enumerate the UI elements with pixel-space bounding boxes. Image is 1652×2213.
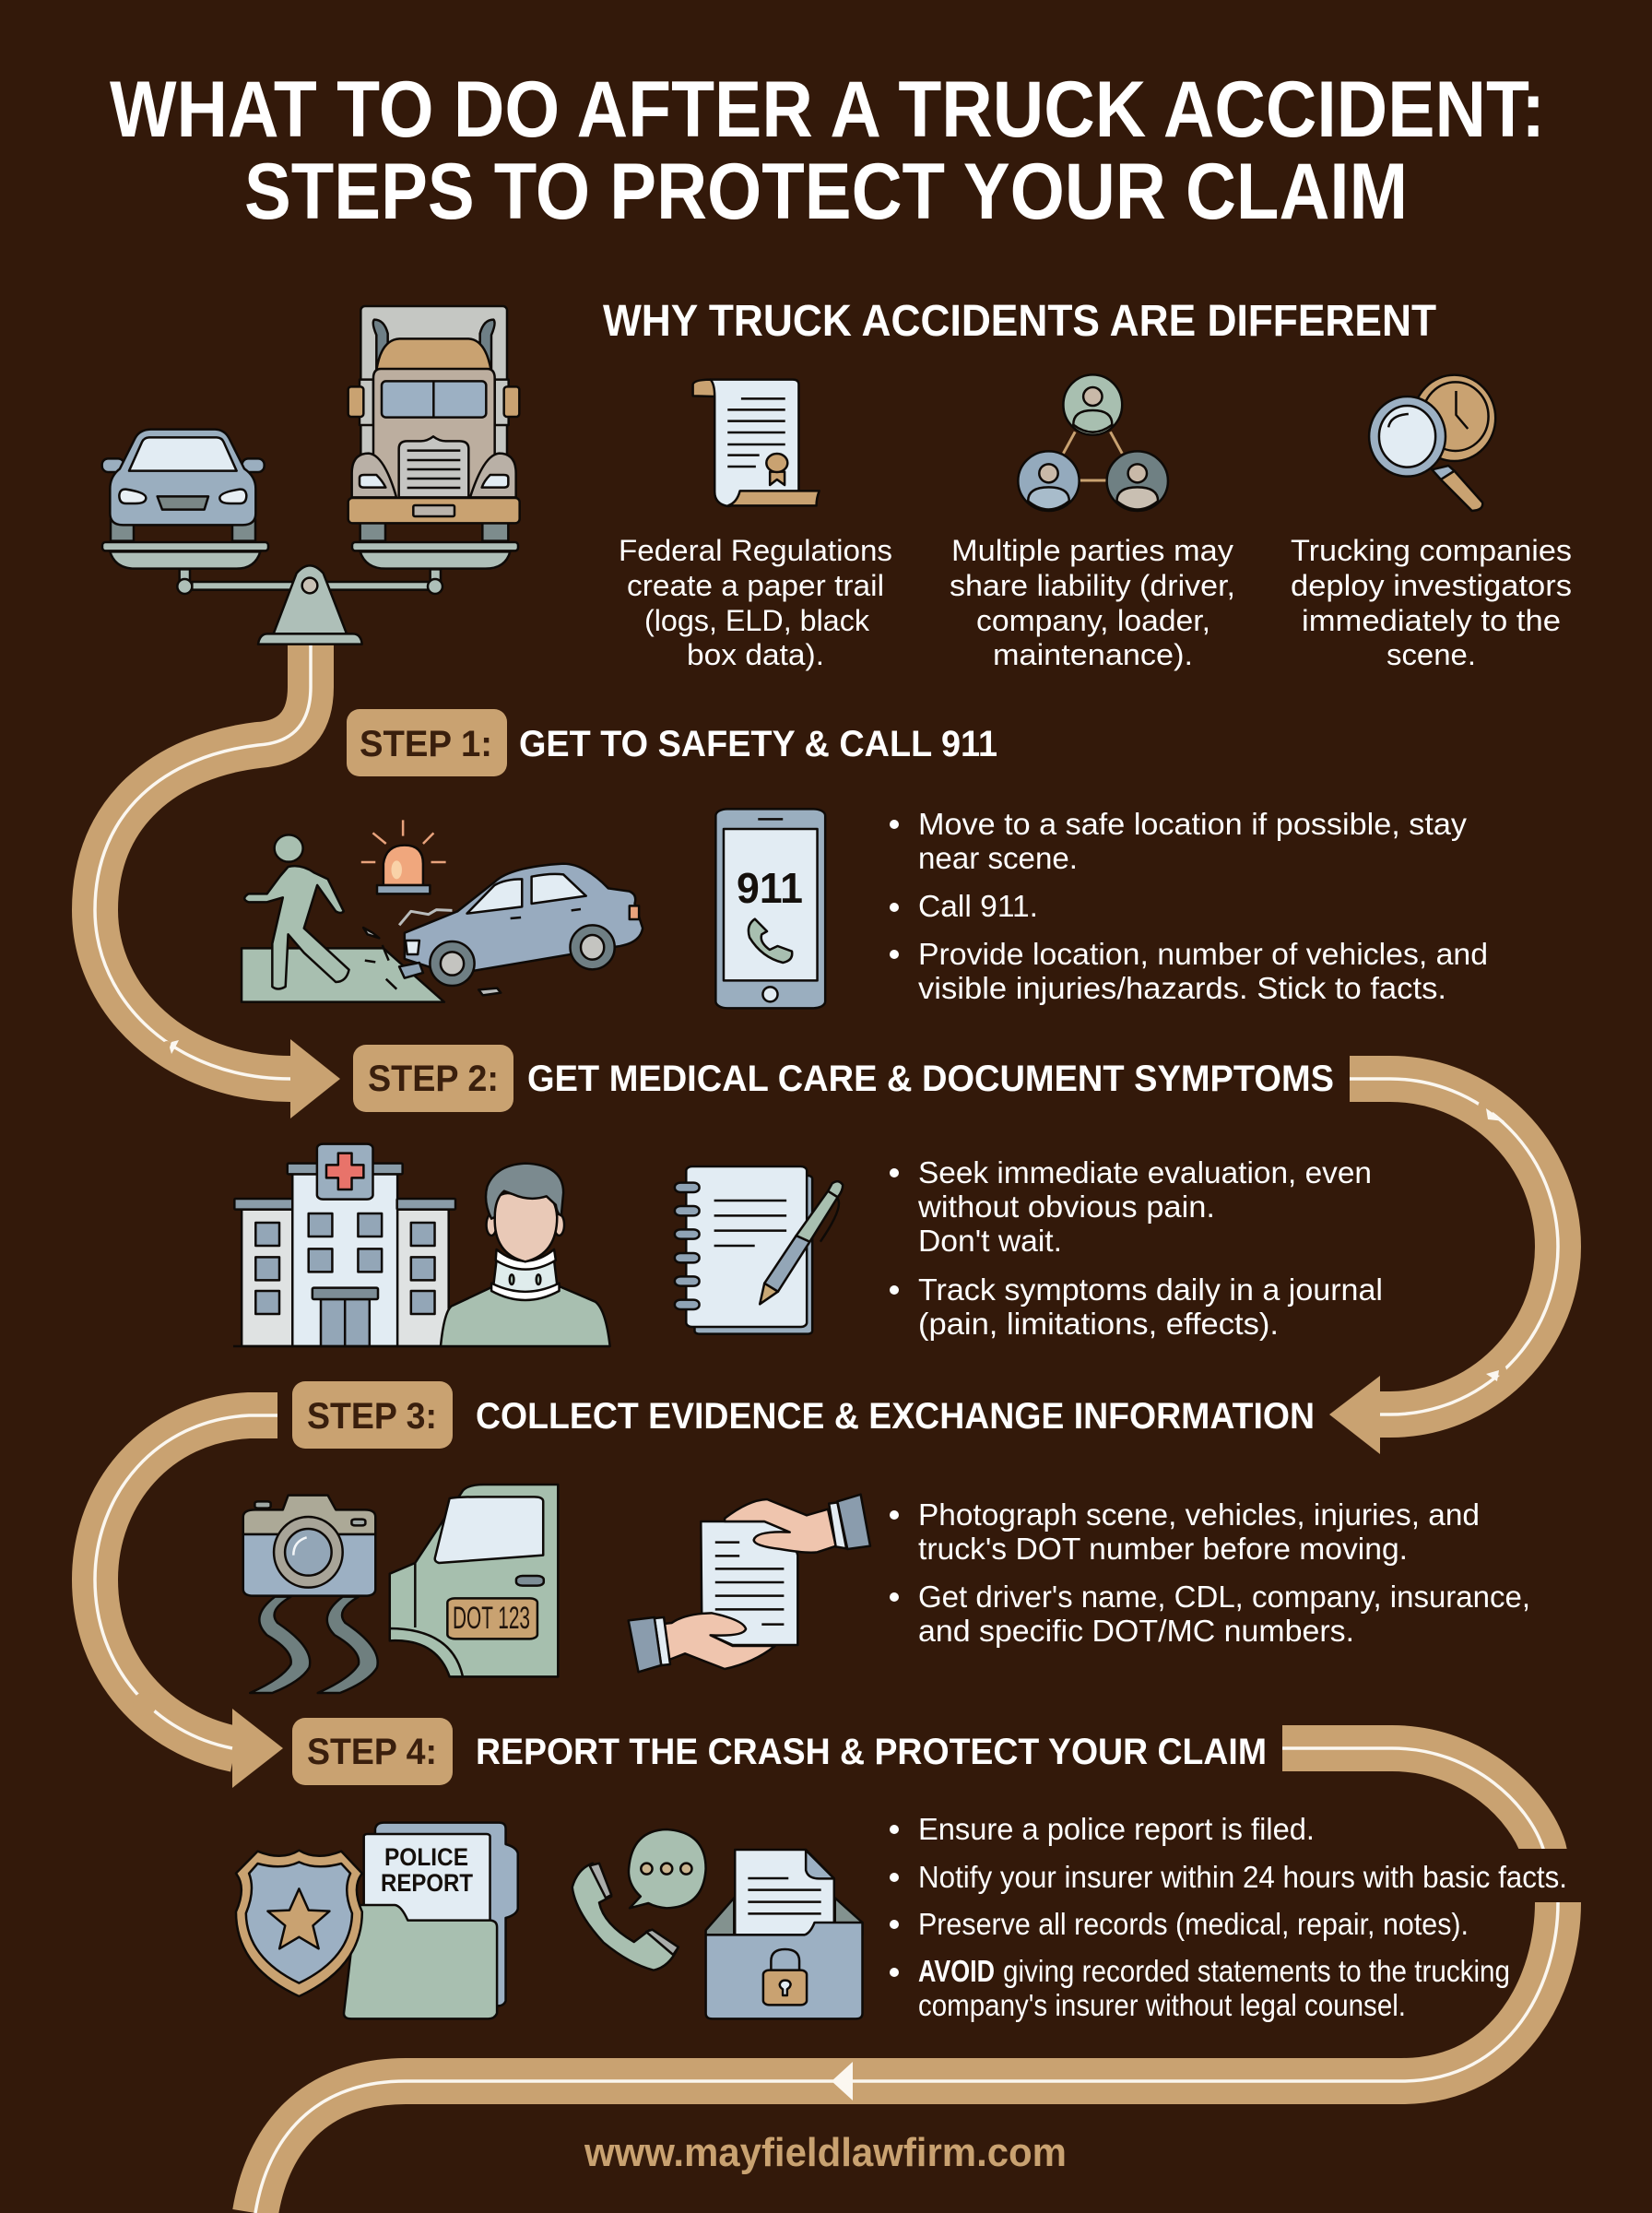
bullets: step 2: (pain, limitations, effects). [918,1307,1279,1341]
truck [348,306,520,541]
bullets: step 4: giving recorded statements to the trucking [1003,1954,1510,1988]
text: federal regulations: Federal Regulations [619,534,892,567]
icon: phone and speech bubble [572,1829,706,1970]
icon: police badge and report folder: REPORT [381,1869,473,1897]
road: step 4 curve to the notify line [1282,1748,1595,1902]
bullets: step 4: company's insurer without legal counsel. [918,1988,1406,2022]
icon: hospital [233,1144,610,1346]
panel: step 4 [236,1718,1567,2022]
road: lower loop running off the page [255,1902,1558,2213]
text: trucking companies [1291,534,1572,671]
bullets: step 3 [890,1497,1530,1648]
text: trucking companies: scene. [1386,638,1476,671]
icon: phone dialing 911 [715,809,825,1008]
icon: patient in neck brace [441,1164,610,1346]
icon: police badge and report folder: POLICE [384,1843,468,1871]
bullets: step 3: truck's DOT number before moving. [918,1532,1408,1566]
bullets: step 2: Don't wait. [918,1224,1062,1258]
badge: step 3: STEP 3: [307,1396,437,1437]
bullets: step 3: Photograph scene, vehicles, injuries, and [918,1497,1480,1532]
heading: report the crash: REPORT THE CRASH & PROTECT YOUR CLAIM [476,1732,1267,1772]
bullets: step 4: AVOID [918,1954,995,1988]
icon: magnifier and clock [1369,375,1495,511]
bullets: step 1: visible injuries/hazards. Stick to facts. [918,971,1446,1005]
panel: why truck accidents are different [603,297,1572,671]
bullets: step 2 [890,1155,1383,1341]
badge: step 3 [292,1381,453,1449]
heading: collect evidence: COLLECT EVIDENCE & EXCHANGE INFORMATION [476,1396,1315,1437]
footer: website: www.mayfieldlawfirm.com [584,2130,1067,2175]
car [102,430,265,541]
heading: get to safety: GET TO SAFETY & CALL 911 [519,724,997,764]
icon: hands exchanging a document [629,1495,870,1672]
bullets: step 3: and specific DOT/MC numbers. [918,1614,1354,1648]
balance scale [102,542,518,645]
text: multiple parties: maintenance). [993,638,1193,671]
badge: step 1: STEP 1: [360,724,492,764]
text: trucking companies: deploy investigators [1291,569,1572,602]
icon: truck door with DOT number: DOT 123 [453,1601,530,1636]
text: trucking companies: Trucking companies [1291,534,1572,567]
icon: locked records folder [706,1850,862,2018]
text: multiple parties: company, loader, [976,604,1210,637]
icon: regulations scroll [693,380,820,506]
icon: three connected parties [1018,374,1168,511]
icon: car and truck on a balance scale [102,306,520,645]
icon: truck door with DOT number [390,1485,558,1676]
panel: step 3 [243,1381,1530,1693]
icon: police badge and report folder [236,1823,518,2018]
text: federal regulations: (logs, ELD, black [644,604,870,637]
icon: person walking from crash [242,820,643,1002]
badge: step 4: STEP 4: [307,1732,437,1772]
bullets: step 4: Ensure a police report is filed. [918,1812,1315,1846]
icon: symptom journal and pen [675,1166,843,1334]
badge: step 4 [292,1718,453,1785]
bullets: step 1: near scene. [918,841,1078,875]
road arrow: step 2 to step 3 [1329,1079,1558,1454]
badge: step 2 [353,1045,513,1112]
bullets: step 1: Call 911. [918,889,1038,923]
badge: step 1 [347,709,507,776]
title [110,65,1545,236]
heading: get medical care: GET MEDICAL CARE & DOCUMENT SYMPTOMS [527,1059,1334,1099]
text: federal regulations: box data). [687,638,824,671]
heading: why truck accidents are different: WHY TRUCK ACCIDENTS ARE DIFFERENT [603,297,1436,346]
text: multiple parties [950,534,1235,671]
bullets: step 3: Get driver's name, CDL, company, insurance, [918,1580,1530,1614]
bullets: step 1: Provide location, number of vehicles, and [918,937,1488,971]
text: multiple parties: share liability (driver, [950,569,1235,602]
title: STEPS TO PROTECT YOUR CLAIM [244,148,1408,236]
bullets: step 1: Move to a safe location if possible, stay [918,807,1468,841]
bullets: step 4 [890,1812,1567,2022]
badge: step 2: STEP 2: [368,1059,499,1099]
icon: camera and skid marks [243,1496,378,1693]
road arrow: step 3 to step 4 [95,1415,283,1788]
road arrow: scale to step 2 [95,644,340,1118]
icon: phone dialing 911: 911 [737,864,803,912]
text: multiple parties: Multiple parties may [951,534,1233,567]
bullets: step 2: without obvious pain. [917,1189,1215,1224]
bullets: step 1 [890,807,1488,1005]
bullets: step 4: Preserve all records (medical, repair, notes). [918,1907,1469,1941]
bullets: step 2: Track symptoms daily in a journal [918,1272,1383,1307]
panel: step 2 [233,1045,1383,1346]
bullets: step 2: Seek immediate evaluation, even [918,1155,1372,1189]
text: federal regulations: create a paper trail [627,569,884,602]
text: federal regulations [619,534,892,671]
text: trucking companies: immediately to the [1302,604,1561,637]
bullets: step 4: Notify your insurer within 24 hours with basic facts. [918,1860,1567,1894]
panel: step 1 [242,709,1488,1008]
